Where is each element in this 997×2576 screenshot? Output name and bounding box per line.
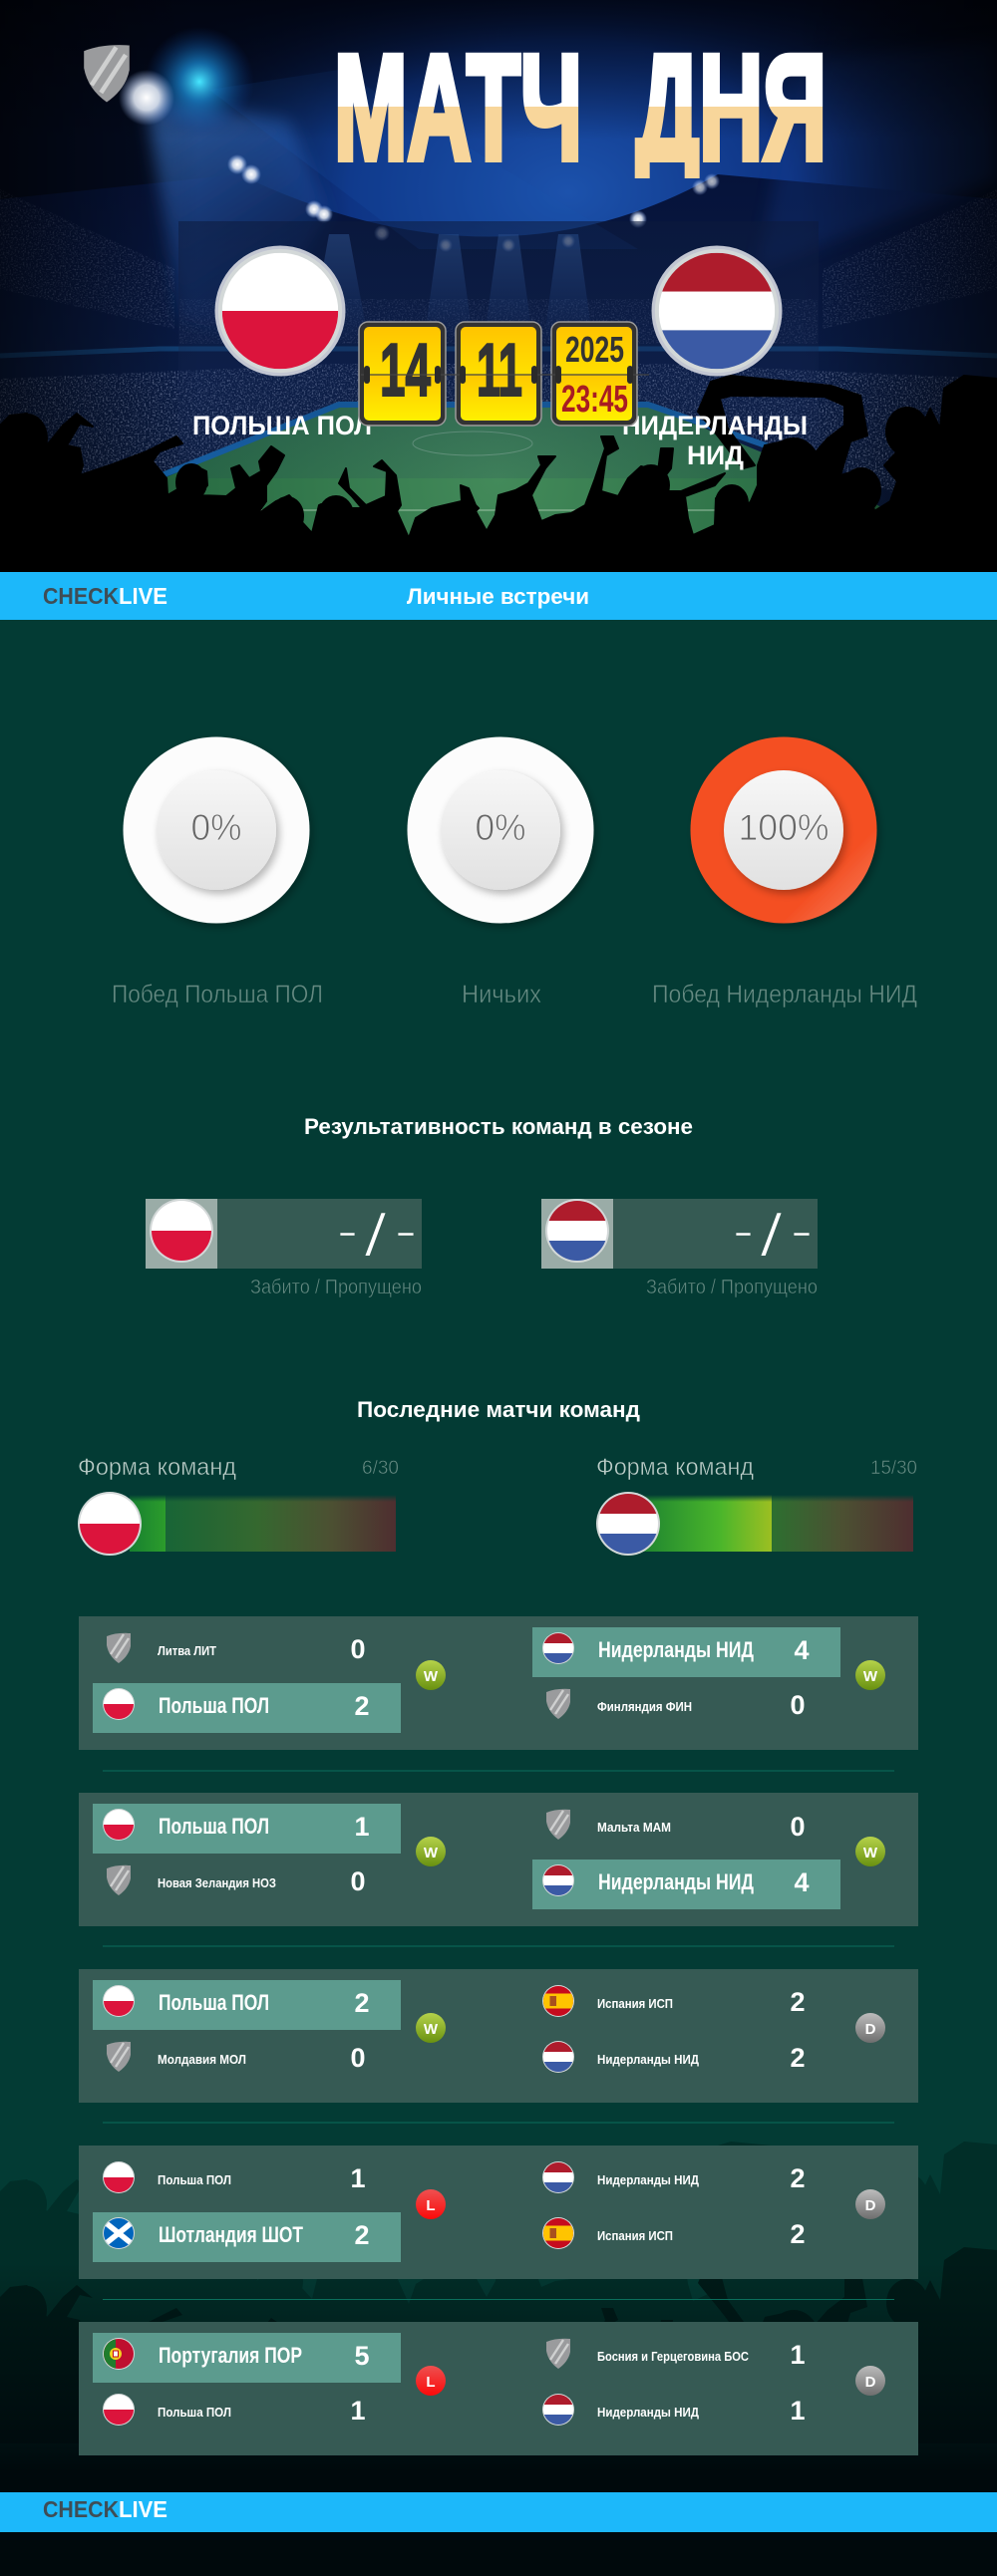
match row 2: Новая Зеландия НОЗ (158, 1875, 276, 1890)
donut: Netherlands wins (690, 737, 877, 923)
away team name: НИД (687, 440, 744, 470)
match row 5: 1 (790, 2340, 806, 2370)
heading: head-to-head: Личные встречи (407, 584, 589, 609)
card: month (456, 322, 541, 426)
match row 1 (79, 1616, 918, 1750)
match row 5: Португалия ПОР (159, 2343, 302, 2368)
match row 3: Польша ПОЛ (159, 1990, 269, 2015)
match row 5: 5 (354, 2341, 370, 2371)
season stat: Poland: – (398, 1196, 414, 1263)
match row 1: Финляндия ФИН (597, 1699, 692, 1714)
match row 4: 1 (350, 2163, 366, 2193)
match row 3 (79, 1969, 918, 2103)
match row 1: 2 (354, 1691, 370, 1721)
logo: CheckLive (43, 583, 167, 609)
match row 5: Польша ПОЛ (158, 2405, 231, 2420)
match row 2: Мальта МАМ (597, 1820, 671, 1835)
match row 2: 4 (794, 1867, 810, 1897)
match row 2: 0 (350, 1866, 366, 1896)
match row 4: Польша ПОЛ (158, 2172, 231, 2187)
title: ДНЯ (636, 24, 827, 191)
match row 2 (79, 1793, 918, 1926)
heading: season performance: Результативность команд в сезоне (304, 1114, 693, 1139)
match row 2: Польша ПОЛ (159, 1814, 269, 1839)
match row 4: L (426, 2197, 436, 2214)
match row 3: W (424, 2021, 439, 2038)
match row 4: 2 (790, 2163, 806, 2193)
card: day: 14 (380, 328, 431, 412)
match row 1: W (424, 1668, 439, 1685)
form meter: Netherlands (596, 1454, 917, 1556)
match row 2: 1 (354, 1812, 370, 1842)
icon: shield logo (84, 45, 130, 103)
match row 2: Нидерланды НИД (598, 1869, 754, 1894)
match row 4: 2 (354, 2220, 370, 2250)
match row 5: L (426, 2374, 436, 2391)
match row 5: Босния и Герцеговина БОС (597, 2349, 750, 2364)
header stadium background (0, 0, 997, 572)
form meter: Poland: Форма команд (78, 1454, 236, 1481)
match row 2: W (863, 1845, 878, 1861)
away team flag: Netherlands (652, 245, 782, 377)
header crowd silhouette (0, 376, 997, 572)
match row 5: 1 (350, 2396, 366, 2426)
match row 4: 2 (790, 2219, 806, 2249)
match row 1: 0 (790, 1690, 806, 1720)
match row 5: Нидерланды НИД (597, 2405, 700, 2420)
label: draws: Ничьих (462, 981, 541, 1008)
away team name: НИДЕРЛАНДЫ (622, 411, 808, 440)
match row 2: 0 (790, 1812, 806, 1842)
match row 2: W (424, 1845, 439, 1861)
season caption: Poland: Забито / Пропущено (250, 1277, 422, 1298)
label: Netherlands wins: Побед Нидерланды НИД (652, 981, 917, 1008)
logo: CheckLive: LIVE (119, 583, 167, 609)
form meter: Netherlands: 15/30 (870, 1458, 917, 1479)
match row 3: 2 (790, 1987, 806, 2017)
match row 3: Испания ИСП (597, 1996, 673, 2011)
translucent match panel (178, 221, 819, 478)
title (337, 52, 824, 178)
top blue bar (0, 572, 997, 620)
match row 1: Литва ЛИТ (158, 1643, 216, 1658)
season stat: Netherlands: – (736, 1196, 751, 1263)
match row 3: Нидерланды НИД (597, 2052, 700, 2067)
match row 1: Польша ПОЛ (159, 1693, 269, 1718)
footer bar: CHECK (43, 2496, 119, 2522)
form meter: Poland: 6/30 (362, 1458, 399, 1479)
form meter: Poland (78, 1454, 399, 1556)
card: day (359, 322, 446, 426)
match row 3: 0 (350, 2043, 366, 2073)
match row 1: Нидерланды НИД (598, 1637, 754, 1662)
match row 4 (79, 2146, 918, 2279)
season stat: Netherlands: – (794, 1196, 810, 1263)
match row 1: 0 (350, 1634, 366, 1664)
heading: recent matches: Последние матчи команд (357, 1397, 640, 1422)
match row 4: Шотландия ШОТ (159, 2222, 303, 2247)
title: МАТЧ (334, 24, 582, 191)
match row 5: 1 (790, 2396, 806, 2426)
home team name: ПОЛЬША ПОЛ (192, 411, 372, 440)
donut: Netherlands wins: 100% (738, 807, 830, 848)
away team name (622, 411, 808, 470)
match row 5 (79, 2322, 918, 2455)
flip date cards (359, 322, 649, 426)
home team flag: Poland (215, 245, 345, 377)
match row 4: D (865, 2197, 876, 2214)
season stat: Poland: – (340, 1196, 355, 1263)
card: year and time: 2025 (565, 329, 624, 370)
match row 4: Испания ИСП (597, 2228, 673, 2243)
donut: draws: 0% (475, 807, 526, 848)
match row 3: 2 (354, 1988, 370, 2018)
match row 4: Нидерланды НИД (597, 2172, 700, 2187)
season stat: Poland (146, 1196, 422, 1269)
match row 3: D (865, 2021, 876, 2038)
form meter: Netherlands: Форма команд (596, 1454, 754, 1481)
season stat: Netherlands: / (760, 1202, 783, 1269)
footer bar (0, 2492, 997, 2532)
match row 1: 4 (794, 1635, 810, 1665)
match row 3: 2 (790, 2043, 806, 2073)
logo: CheckLive: CHECK (43, 583, 119, 609)
match row 1: W (863, 1668, 878, 1685)
label: Poland wins: Побед Польша ПОЛ (112, 981, 323, 1008)
donut: Poland wins: 0% (191, 807, 241, 848)
match row 3: Молдавия МОЛ (158, 2052, 246, 2067)
match row 5: D (865, 2374, 876, 2391)
card: month: 11 (477, 328, 522, 412)
card: year and time (551, 322, 637, 426)
card: year and time: 23:45 (561, 379, 628, 421)
donut: Poland wins (124, 737, 309, 923)
donut: draws (407, 737, 594, 923)
footer bar: LIVE (119, 2496, 167, 2522)
lower crowd silhouette background (0, 2142, 997, 2576)
season stat: Poland: / (364, 1202, 387, 1269)
season stat: Netherlands (541, 1196, 818, 1269)
season caption: Netherlands: Забито / Пропущено (646, 1277, 818, 1298)
